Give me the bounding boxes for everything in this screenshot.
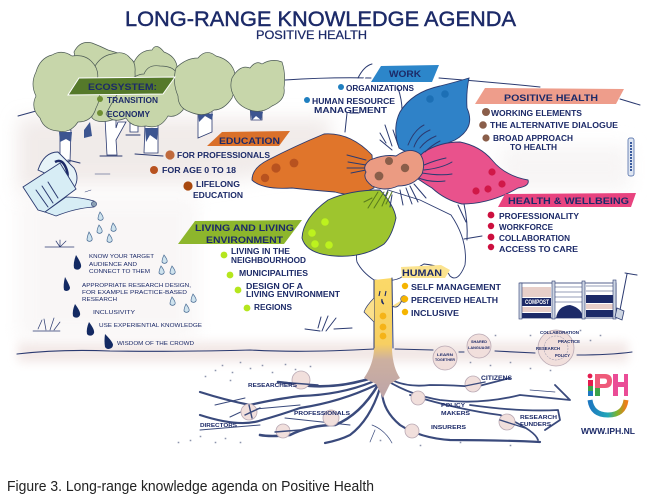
- banner: ecosystem: ECOSYSTEM:: [88, 82, 157, 93]
- circle: research practice policy: RESEARCH: [536, 346, 561, 351]
- list: positive health: [479, 108, 619, 152]
- root circles and stakeholder labels: POLICY: [441, 403, 465, 409]
- petal: orange: [252, 134, 374, 194]
- research principles with dark drops: [64, 254, 202, 349]
- research principles with dark drops: INCLUSIVITY: [93, 310, 135, 316]
- banner: ecosystem: [68, 77, 175, 95]
- research principles with dark drops: AUDIENCE AND: [89, 262, 137, 268]
- list: health and wellbeing: WORKFORCE: [499, 223, 554, 232]
- icon: small label tag: [628, 138, 634, 176]
- root circles and stakeholder labels: DIRECTORS: [200, 423, 237, 429]
- illustration: compost bin: COMPOST: [525, 300, 549, 306]
- root circles and stakeholder labels: INSURERS: [431, 425, 466, 431]
- petal: green: [302, 190, 396, 256]
- research principles with dark drops: APPROPRIATE RESEARCH DESIGN,: [82, 283, 192, 289]
- petal veins: [347, 125, 452, 208]
- research principles with dark drops: FOR EXAMPLE PRACTICE-BASED: [82, 290, 187, 296]
- circle: learn together: [433, 346, 457, 370]
- logo: iPH: [581, 374, 635, 436]
- roots: [200, 378, 570, 443]
- petal: blue: [396, 78, 470, 155]
- list: work: ORGANIZATIONS: [346, 84, 415, 93]
- list: health and wellbeing: COLLABORATION: [499, 234, 570, 243]
- root circles and stakeholder labels: PROFESSIONALS: [294, 411, 350, 417]
- title: LONG-RANGE KNOWLEDGE AGENDA: [125, 8, 516, 31]
- circle: research practice policy: POLICY: [555, 353, 570, 358]
- list: living: DESIGN OF A: [246, 282, 303, 291]
- trees: [33, 42, 285, 163]
- list: living: MUNICIPALITIES: [239, 269, 309, 278]
- white petals behind: [340, 64, 482, 281]
- research principles with dark drops: WISDOM OF THE CROWD: [117, 341, 194, 347]
- stem character: [364, 278, 407, 398]
- research principles with dark drops: USE EXPERIENTIAL KNOWLEDGE: [99, 323, 202, 329]
- list: education: FOR AGE 0 TO 18: [162, 166, 237, 175]
- horizon lines: [17, 78, 640, 355]
- list: education: FOR PROFESSIONALS: [177, 151, 271, 160]
- list: health and wellbeing: [488, 212, 580, 254]
- list: positive health: THE ALTERNATIVE DIALOGUE: [490, 121, 619, 130]
- circle: shared language: LANGUAGE: [468, 345, 490, 350]
- list: education: [150, 150, 271, 200]
- grass tufts: [33, 174, 352, 331]
- banner: human: HUMAN: [402, 268, 442, 279]
- list: ecosystem: ECONOMY: [107, 110, 151, 119]
- list: human: INCLUSIVE: [411, 309, 460, 318]
- logo website: WWW.IPH.NL: [581, 427, 635, 436]
- banner: living and living environment: LIVING AND LIVING: [195, 223, 294, 233]
- list: ecosystem: TRANSITION: [107, 96, 158, 105]
- circle: shared language: [467, 334, 491, 358]
- circle: research practice policy: PRACTICE: [558, 339, 580, 344]
- petal: pink: [414, 142, 528, 204]
- research principles with dark drops: KNOW YOUR TARGET: [89, 254, 155, 260]
- list: work: [304, 84, 415, 115]
- circle: research practice policy: COLLABORATION: [540, 330, 580, 335]
- banner: health and wellbeing: HEALTH & WELLBEING: [508, 196, 629, 207]
- list: living: NEIGHBOURHOOD: [231, 256, 306, 265]
- root circles and stakeholder labels: FUNDERS: [520, 422, 551, 428]
- banner: education: [207, 131, 290, 147]
- circle: shared language: SHARED: [471, 339, 487, 344]
- root circles and stakeholder labels: MAKERS: [441, 411, 470, 417]
- list: ecosystem: [97, 96, 158, 119]
- list: living: LIVING ENVIRONMENT: [246, 290, 340, 299]
- root circles and stakeholder labels: RESEARCH: [520, 415, 557, 421]
- circle: learn together: LEARN: [437, 352, 453, 357]
- banner: positive health: [475, 88, 624, 104]
- root soil speckles: [178, 330, 601, 446]
- flower centre: [365, 150, 424, 189]
- list: education: LIFELONG: [196, 180, 240, 189]
- list: human: SELF MANAGEMENT: [411, 283, 501, 292]
- small water drops: [87, 212, 196, 312]
- circle: research practice policy: [536, 330, 580, 366]
- banner: health and wellbeing: [498, 193, 636, 207]
- illustration: compost bin: [519, 273, 637, 320]
- list: positive health: WORKING ELEMENTS: [491, 109, 583, 118]
- subtitle: POSITIVE HEALTH: [256, 28, 367, 42]
- research principles with dark drops: CONNECT TO THEM: [89, 269, 150, 275]
- list: human: [402, 283, 501, 318]
- list: human: PERCEIVED HEALTH: [411, 296, 498, 305]
- banner: living and living environment: [178, 220, 302, 245]
- circle: learn together: TOGETHER: [435, 357, 455, 362]
- background ground shading: [18, 118, 630, 362]
- list: positive health: TO HEALTH: [510, 143, 557, 152]
- banner: human: [401, 265, 450, 279]
- figure caption: Figure 3. Long-range knowledge agenda on Positive Health: [7, 479, 374, 495]
- list: health and wellbeing: ACCESS TO CARE: [499, 245, 579, 254]
- banner: work: WORK: [389, 69, 421, 80]
- list: positive health: BROAD APPROACH: [493, 134, 573, 143]
- banner: work: [371, 65, 439, 82]
- list: living: REGIONS: [254, 303, 293, 312]
- icon: watering can: [23, 152, 97, 216]
- list: education: EDUCATION: [193, 191, 243, 200]
- list: living: LIVING IN THE: [231, 247, 291, 256]
- list: living: [221, 247, 340, 312]
- root circles and stakeholder labels: CITIZENS: [481, 376, 512, 382]
- logo letters: [588, 374, 628, 396]
- root circles and stakeholder labels: RESEARCHERS: [248, 383, 297, 389]
- tree trunks: [59, 105, 263, 163]
- list: work: HUMAN RESOURCE: [312, 97, 396, 106]
- flower dots: [261, 90, 506, 249]
- icon: drops: [64, 255, 113, 349]
- banner: positive health: POSITIVE HEALTH: [504, 93, 598, 104]
- list: health and wellbeing: PROFESSIONALITY: [499, 212, 580, 221]
- flower: [252, 64, 528, 281]
- list: work: MANAGEMENT: [314, 106, 387, 115]
- banner: education: EDUCATION: [219, 136, 280, 147]
- research principles with dark drops: RESEARCH: [82, 297, 117, 303]
- banner: living and living environment: ENVIRONMENT: [206, 235, 284, 245]
- logo arc: [590, 400, 626, 415]
- root circles and stakeholder labels: [200, 330, 580, 438]
